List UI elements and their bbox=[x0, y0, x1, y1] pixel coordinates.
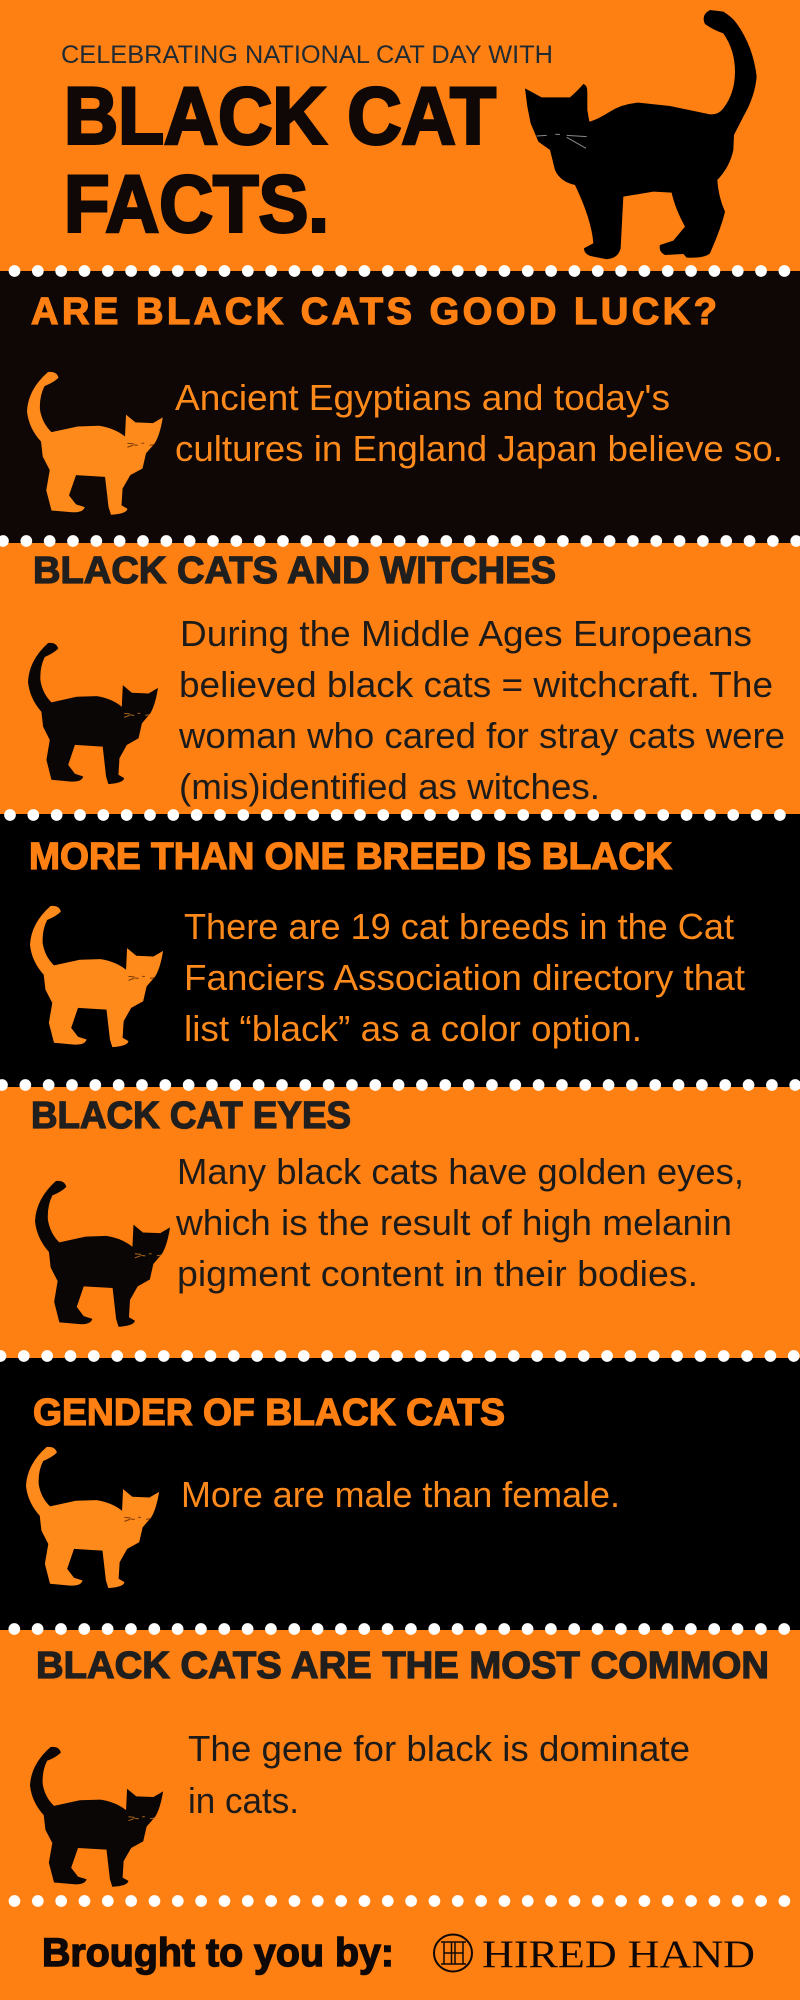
heading: ARE BLACK CATS GOOD LUCK? bbox=[31, 291, 717, 333]
body text: Ancient Egyptians and today's bbox=[175, 377, 670, 418]
body text bbox=[175, 1151, 744, 1294]
heading: BLACK CAT EYES bbox=[31, 1095, 351, 1137]
panel background bbox=[0, 543, 800, 814]
body text bbox=[184, 906, 745, 1049]
panel background bbox=[0, 814, 800, 1087]
heading: BLACK CATS AND WITCHES bbox=[33, 550, 556, 592]
body text: woman who cared for stray cats were bbox=[178, 715, 785, 756]
logo mark bbox=[434, 1934, 472, 1972]
body text: list “black” as a color option. bbox=[184, 1008, 642, 1049]
body text bbox=[175, 377, 783, 469]
icon: black cat bbox=[28, 643, 158, 784]
panel background bbox=[0, 1358, 800, 1630]
panel: header bbox=[0, 0, 800, 271]
body text: (mis)identified as witches. bbox=[179, 766, 600, 807]
body text: which is the result of high melanin bbox=[175, 1202, 732, 1243]
header background bbox=[0, 0, 800, 271]
panel background bbox=[0, 1630, 800, 2000]
body text: cultures in England Japan believe so. bbox=[175, 428, 783, 469]
body text: Many black cats have golden eyes, bbox=[177, 1151, 744, 1192]
footer credit bbox=[42, 1931, 755, 1976]
body text bbox=[188, 1728, 690, 1821]
body text: During the Middle Ages Europeans bbox=[180, 613, 752, 654]
icon: orange cat bbox=[30, 906, 163, 1047]
panel: gender of black cats bbox=[0, 1358, 800, 1630]
panel: black cats are the most common bbox=[0, 1630, 800, 2000]
hired hand wordmark: HIRED HAND bbox=[482, 1933, 755, 1976]
body text: believed black cats = witchcraft. The bbox=[179, 664, 773, 705]
body text: in cats. bbox=[188, 1780, 299, 1821]
icon: orange cat bbox=[27, 372, 163, 515]
panel: black cat eyes bbox=[0, 1087, 800, 1358]
heading: BLACK CATS ARE THE MOST COMMON bbox=[36, 1645, 769, 1687]
icon: large black cat bbox=[525, 10, 757, 259]
body text bbox=[178, 613, 785, 807]
subtitle: CELEBRATING NATIONAL CAT DAY WITH bbox=[61, 41, 553, 69]
body text: Fanciers Association directory that bbox=[184, 957, 745, 998]
panel: black cats and witches bbox=[0, 543, 800, 814]
brought to you by: Brought to you by: bbox=[42, 1931, 394, 1975]
icon: black cat bbox=[35, 1181, 170, 1327]
body text: More are male than female. bbox=[181, 1474, 620, 1515]
body text: There are 19 cat breeds in the Cat bbox=[184, 906, 734, 947]
icon: black cat bbox=[30, 1747, 163, 1887]
title line one: BLACK CAT bbox=[64, 72, 496, 162]
title line two: FACTS. bbox=[64, 160, 329, 250]
icon: orange cat bbox=[26, 1447, 159, 1588]
panel background bbox=[0, 1087, 800, 1358]
heading: MORE THAN ONE BREED IS BLACK bbox=[29, 836, 673, 878]
panel: more than one breed is black bbox=[0, 814, 800, 1087]
heading: GENDER OF BLACK CATS bbox=[33, 1392, 505, 1434]
panel background bbox=[0, 271, 800, 543]
body text: pigment content in their bodies. bbox=[177, 1253, 698, 1294]
panel: are black cats good luck bbox=[0, 271, 800, 543]
body text: The gene for black is dominate bbox=[188, 1728, 690, 1769]
